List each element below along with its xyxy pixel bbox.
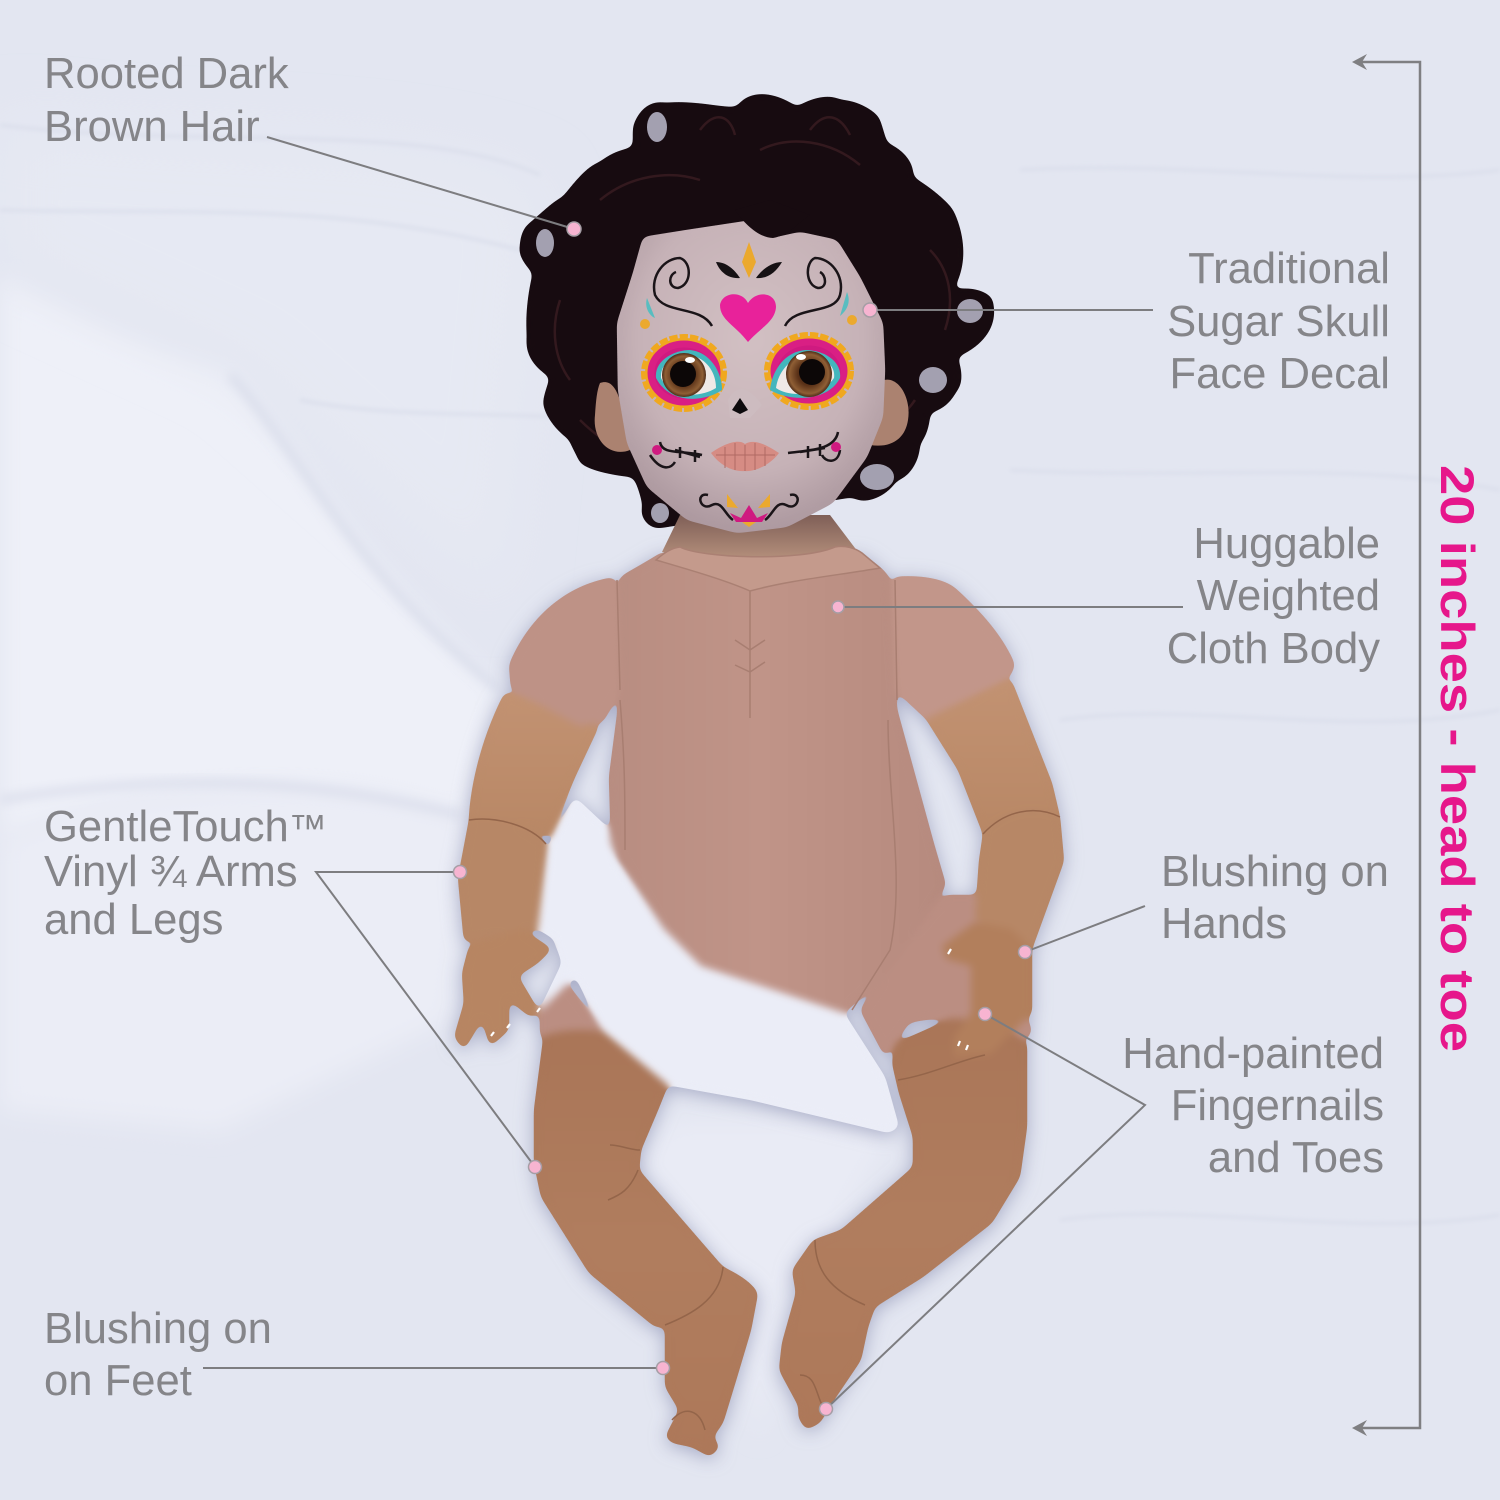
label: vinyl limbs: and Legs [44, 896, 223, 944]
label: blushing hands: Hands [1161, 900, 1287, 948]
left pants [540, 976, 603, 1037]
left leg [534, 1029, 758, 1457]
label: face decal: Traditional [1188, 245, 1390, 293]
chin ornament [700, 495, 798, 520]
hair tuft on forehead [735, 200, 810, 238]
label: fingernails: Fingernails [1171, 1082, 1384, 1130]
height label: 20 inches - head to toe [1431, 465, 1484, 1052]
label: blushing feet: Blushing on [44, 1305, 272, 1353]
doll body with soft shadow [454, 552, 1064, 1457]
face [617, 220, 885, 533]
neck [662, 515, 858, 560]
doll [454, 94, 1064, 1457]
hair curl gaps [536, 112, 983, 523]
fingernails [491, 949, 968, 1050]
label: face decal: Face Decal [1170, 350, 1390, 398]
nose [728, 389, 762, 418]
ears [595, 380, 909, 452]
forehead ornaments [742, 242, 756, 278]
right pants [860, 895, 1032, 1057]
sugar skull decal [640, 242, 857, 527]
label: fingernails: and Toes [1208, 1134, 1384, 1182]
white cloth drape [538, 797, 899, 1133]
left forearm [458, 819, 546, 942]
measurement bracket [1352, 54, 1420, 1436]
label: hair: Brown Hair [44, 103, 260, 151]
label: face decal: Sugar Skull [1167, 298, 1390, 346]
label: blushing feet: on Feet [44, 1357, 192, 1405]
hair [519, 94, 994, 528]
left sleeve [509, 577, 620, 726]
label: cloth body: Weighted [1197, 572, 1380, 620]
label: hair: Rooted Dark [44, 50, 289, 98]
collar ruffle [656, 546, 880, 591]
hair curl texture [555, 117, 950, 450]
torso [609, 552, 946, 1013]
lips [711, 442, 779, 471]
right forearm [975, 811, 1064, 949]
label: cloth body: Huggable [1193, 520, 1380, 568]
left eye [645, 338, 723, 408]
label: vinyl limbs: Vinyl ¾ Arms [44, 848, 298, 896]
label: cloth body: Cloth Body [1167, 625, 1380, 673]
callout dots [454, 222, 1032, 1416]
left hand [454, 929, 552, 1050]
label: vinyl limbs: GentleTouch™ [44, 803, 327, 851]
torso seams and gathers [617, 580, 897, 1010]
heart [720, 294, 776, 342]
leader lines [203, 137, 1183, 1409]
limb creases [469, 811, 1060, 1430]
right hand [942, 922, 1032, 1057]
right eye [768, 336, 850, 406]
right sleeve [893, 576, 1015, 719]
right arm [926, 679, 1060, 834]
cheek stitches [650, 432, 840, 467]
label: blushing hands: Blushing on [1161, 848, 1389, 896]
label: fingernails: Hand-painted [1122, 1030, 1384, 1078]
left arm [469, 692, 599, 837]
right leg [779, 1010, 1027, 1430]
